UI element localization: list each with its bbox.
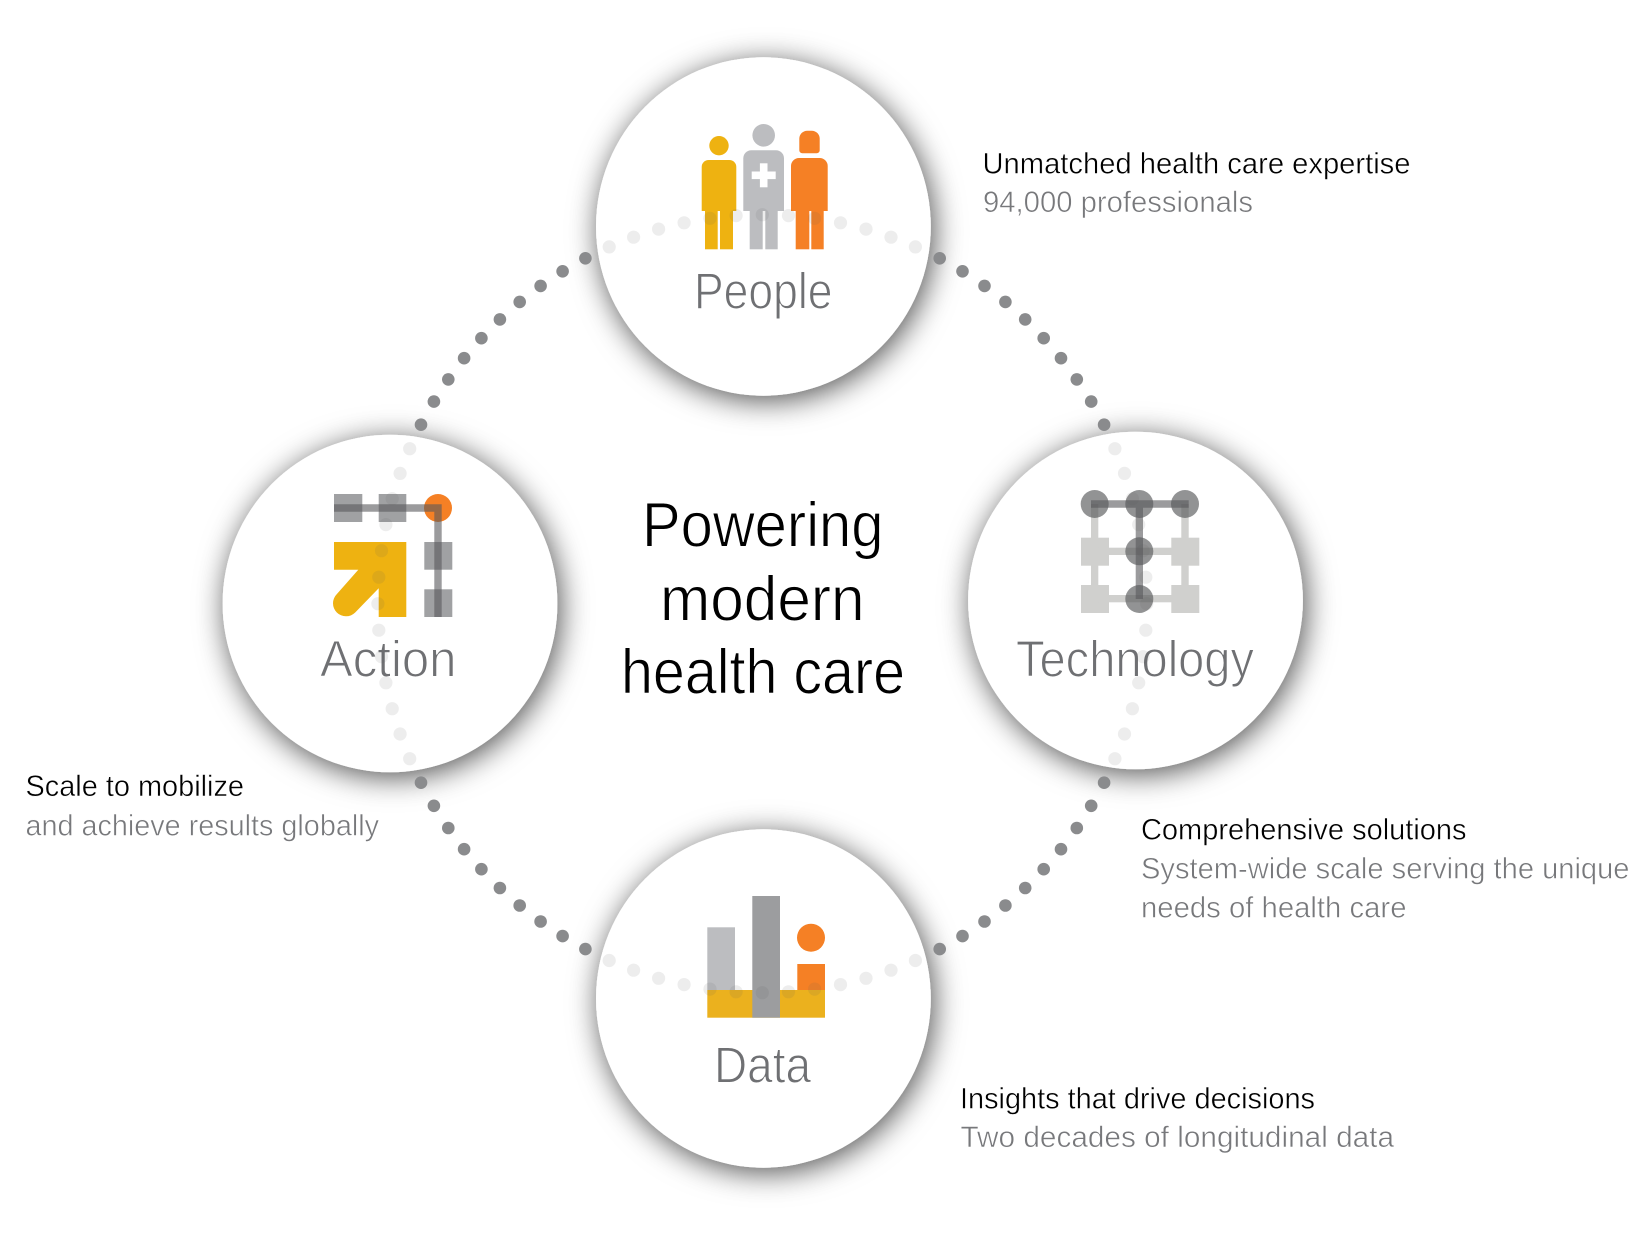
icon: technology node network xyxy=(1081,490,1199,613)
connector dots: people arc xyxy=(603,208,922,253)
dotted arc: people to technology xyxy=(933,252,1110,431)
title: Powering xyxy=(642,491,884,561)
callout: action: and achieve results globally xyxy=(26,809,379,842)
panel: people xyxy=(596,57,931,396)
callout: people xyxy=(982,148,1410,219)
callout: people: Unmatched health care expertise xyxy=(982,148,1410,181)
icon: action arrow grid xyxy=(333,494,452,617)
label: Data: Data xyxy=(714,1036,812,1093)
icon: data bar chart xyxy=(707,896,825,1018)
panel: technology xyxy=(968,432,1303,769)
connector dots: data arc xyxy=(603,954,922,999)
icon: yellow person xyxy=(702,136,736,249)
icon: orange person xyxy=(791,131,828,249)
dotted arc: action to people xyxy=(415,252,592,431)
label: Action: Action xyxy=(320,631,456,688)
callout: technology: Comprehensive solutions xyxy=(1141,814,1466,846)
connector dots: action arc xyxy=(371,442,416,765)
title: modern xyxy=(660,565,864,635)
label: Technology: Technology xyxy=(1016,631,1254,688)
icon: three people xyxy=(702,124,828,249)
label: People: People xyxy=(694,262,832,319)
dotted arc: data to action xyxy=(415,776,592,955)
panel: action xyxy=(223,435,557,772)
callout: action: Scale to mobilize xyxy=(26,770,244,803)
connector dots: technology arc xyxy=(1108,442,1153,765)
icon: yellow arrow xyxy=(333,542,406,617)
dotted arc: technology to data xyxy=(933,776,1110,955)
callout: data: Insights that drive decisions xyxy=(960,1082,1315,1116)
callout: technology: System-wide scale serving the unique xyxy=(1141,853,1630,886)
panel: data xyxy=(596,829,931,1168)
title xyxy=(621,491,905,707)
title: health care xyxy=(621,637,905,707)
callout: technology: needs of health care xyxy=(1141,892,1406,925)
callout: action xyxy=(26,770,379,842)
icon: grey clinician with cross xyxy=(743,124,784,249)
callout: data: Two decades of longitudinal data xyxy=(960,1121,1395,1154)
callout: people: 94,000 professionals xyxy=(983,186,1253,219)
callout: technology xyxy=(1141,814,1630,925)
callout: data xyxy=(960,1082,1395,1154)
